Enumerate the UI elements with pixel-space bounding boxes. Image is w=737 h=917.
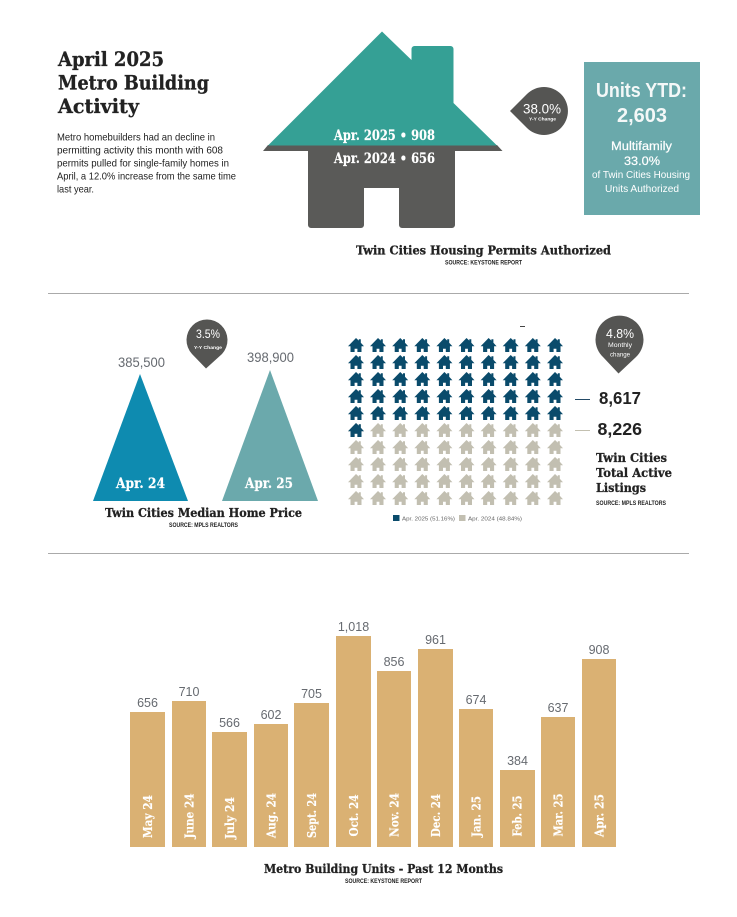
- callout: 3.5% change: [186, 320, 228, 368]
- panel: units YTD: 2,603: [617, 105, 667, 127]
- caption: housing permits: SOURCE: KEYSTONE REPORT: [445, 260, 522, 266]
- bar chart: building units past 12 months: [130, 620, 616, 847]
- label: Apr. 25: Apr. 25: [244, 476, 293, 492]
- bar month labels: June 24: [182, 794, 196, 839]
- bar values: 656: [137, 696, 158, 710]
- bar values: 637: [548, 701, 568, 715]
- callout: 4.8% monthly change: change: [610, 352, 631, 358]
- callout: 38.0% change: 38.0%: [523, 102, 561, 116]
- bar month labels: Jan. 25: [470, 796, 484, 838]
- bar values: 602: [261, 708, 281, 722]
- bar values: 705: [301, 687, 322, 701]
- callout: 38.0% change: [510, 87, 568, 135]
- bar values: 856: [384, 655, 404, 669]
- panel: units YTD: Units YTD:: [596, 80, 687, 102]
- caption: active listings: SOURCE: MPLS REALTORS: [596, 501, 666, 507]
- title: Activity: [57, 95, 140, 118]
- bar month labels: Aug. 24: [264, 793, 278, 839]
- title: April 2025: [57, 48, 164, 71]
- bar month labels: Nov. 24: [388, 793, 402, 837]
- callout: 4.8% monthly change: [595, 316, 644, 374]
- triangle: Apr. 25: [222, 370, 318, 501]
- caption: active listings: Twin Cities: [596, 450, 667, 465]
- bar values: 961: [425, 633, 446, 647]
- bar month labels: Oct. 24: [347, 794, 361, 836]
- active listings values: [575, 388, 642, 439]
- bar values: 674: [466, 693, 486, 707]
- bar values: 566: [219, 716, 240, 730]
- intro text block: permits pulled for single-family homes in: [57, 158, 229, 170]
- callout: 4.8% monthly change: 4.8%: [606, 327, 634, 341]
- intro text block: permitting activity this month with 608: [57, 146, 223, 156]
- label: Apr. 2025: Apr. 2025 • 908: [333, 128, 435, 144]
- value: 398,900: 398,900: [247, 349, 294, 365]
- panel: units YTD: Units Authorized: [605, 183, 679, 195]
- pictogram: active listings houses: [348, 338, 563, 505]
- bar month labels: [141, 793, 606, 840]
- bar month labels: Mar. 25: [552, 794, 566, 836]
- house lower part: Apr. 2024: [263, 145, 502, 228]
- panel: units YTD: [584, 62, 700, 215]
- chart: median home price triangles: [93, 349, 318, 501]
- bar month labels: July 24: [223, 797, 237, 840]
- bar values: [137, 620, 609, 768]
- callout: 3.5% change: Y-Y Change: [194, 345, 223, 350]
- legend: Apr. 2025 (51.16%): [402, 516, 455, 522]
- bar month labels: May 24: [141, 795, 155, 838]
- caption: median home price: SOURCE: MPLS REALTORS: [169, 523, 238, 529]
- caption: active listings: Listings: [596, 480, 646, 495]
- house graphic: housing permits: [263, 32, 502, 228]
- bar values: 908: [589, 643, 609, 657]
- legend: Apr. 2024 (48.84%): [468, 516, 522, 522]
- bar values: 1,018: [338, 620, 369, 634]
- active listings values: 8,617: [599, 388, 641, 408]
- bar month labels: Apr. 25: [592, 794, 606, 838]
- caption: housing permits: Twin Cities Housing Permits Authorized: [356, 242, 611, 258]
- panel: units YTD: Multifamily: [611, 141, 672, 153]
- intro text block: last year.: [57, 184, 94, 196]
- caption: median home price: [105, 505, 302, 529]
- intro text block: April, a 12.0% increase from the same time: [57, 172, 236, 182]
- callout: 4.8% monthly change: Monthly: [608, 343, 632, 349]
- intro text block: [57, 132, 236, 196]
- active listings values: 8,226: [598, 419, 642, 439]
- intro text block: Metro homebuilders had an decline in: [57, 132, 215, 144]
- caption: active listings: Total Active: [596, 465, 672, 480]
- value: 385,500: 385,500: [118, 354, 165, 370]
- title: [57, 48, 209, 118]
- triangle: Apr. 24: [93, 374, 188, 501]
- caption: housing permits: [356, 242, 611, 266]
- callout: 38.0% change: Y-Y Change: [529, 116, 557, 122]
- caption: active listings: [596, 450, 672, 507]
- panel: units YTD: of Twin Cities Housing: [592, 169, 690, 181]
- caption: building units: Metro Building Units - Past 12 Months: [264, 861, 503, 876]
- panel: units YTD: 33.0%: [624, 156, 660, 168]
- house roof: Apr. 2025: [268, 32, 497, 146]
- bar month labels: Sept. 24: [305, 793, 319, 838]
- caption: building units: SOURCE: KEYSTONE REPORT: [345, 879, 422, 885]
- caption: median home price: Twin Cities Median Home Price: [105, 505, 302, 520]
- callout: 3.5% change: 3.5%: [196, 329, 220, 341]
- bar month labels: Feb. 25: [510, 796, 524, 836]
- bar month labels: Dec. 24: [429, 794, 443, 837]
- bar values: 710: [179, 685, 199, 699]
- bars: [130, 636, 616, 847]
- label: Apr. 2024: Apr. 2024 • 656: [333, 151, 435, 167]
- legend: [393, 515, 522, 522]
- caption: building units: [264, 861, 503, 885]
- label: Apr. 24: Apr. 24: [115, 476, 165, 492]
- title: Metro Building: [58, 72, 209, 94]
- bar values: 384: [507, 754, 528, 768]
